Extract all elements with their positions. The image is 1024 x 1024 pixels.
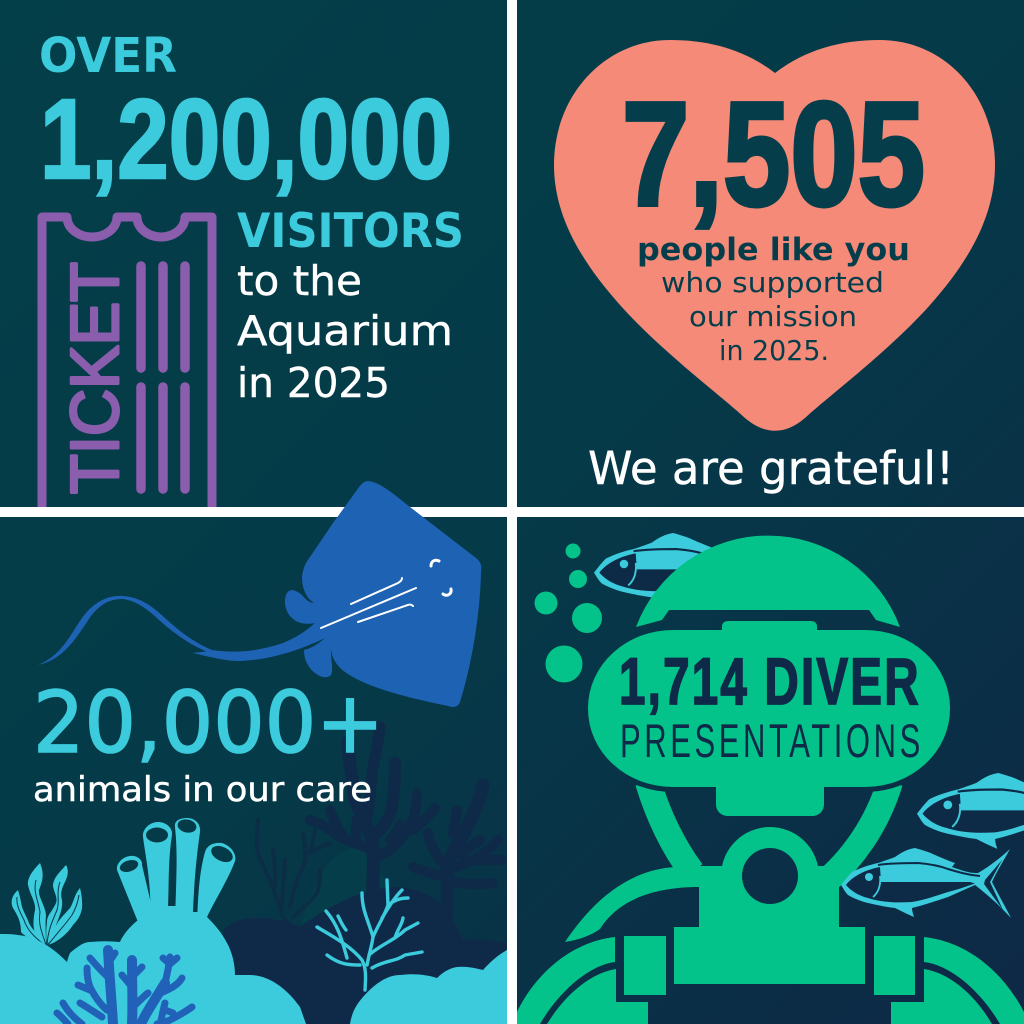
- text: who supported our mission in 2025: [661, 266, 884, 367]
- seaweed: [12, 863, 82, 945]
- icon: fish left: [594, 533, 712, 598]
- text: to the Aquarium in 2025: in 2025: [237, 359, 390, 407]
- dark navy mounds: [223, 887, 507, 1024]
- stat: 7,505: 7,505: [622, 72, 925, 237]
- text: animals in our care: animals in our care: [33, 770, 372, 810]
- icon: fish upper right: [917, 773, 1024, 850]
- coral: light cyan branching: [317, 880, 422, 990]
- coral: tube sponge: [117, 818, 235, 930]
- text: who supported our mission in 2025: our mission: [689, 300, 857, 333]
- stat: 20,000+: 20,000+: [33, 674, 384, 773]
- label: people like you: people like you: [637, 232, 910, 268]
- text: to the Aquarium in 2025: [237, 257, 453, 407]
- icon: stingray: [38, 481, 481, 707]
- text: to the Aquarium in 2025: Aquarium: [237, 307, 453, 355]
- text: we are grateful: We are grateful!: [588, 442, 954, 495]
- icon: bubbles: [534, 544, 602, 682]
- text: to the Aquarium in 2025: to the: [237, 257, 362, 305]
- light cyan mounds: [0, 912, 306, 1024]
- label: visitors: VISITORS: [237, 204, 464, 259]
- stat: 1,200,000: 1,200,000: [40, 76, 452, 202]
- illustration: reef: [0, 727, 507, 1024]
- text: who supported our mission in 2025: in 2025.: [719, 334, 829, 367]
- icon: ticket: [42, 217, 212, 507]
- heading: over: OVER: [39, 28, 177, 84]
- icon: fish lower right: [841, 848, 1011, 918]
- panel: visitors: [39, 28, 464, 507]
- coral: blue branching: [57, 950, 192, 1024]
- text: 1,714 diver: 1,714 DIVER: [619, 645, 919, 719]
- panel: diver presentations: [517, 533, 1024, 1024]
- text: presentations: PRESENTATIONS: [620, 716, 920, 768]
- icon: diver: [517, 536, 1024, 1024]
- text: who supported our mission in 2025: who supported: [661, 266, 884, 299]
- icon: heart: [554, 40, 995, 431]
- icon: ticket: TICKET: [57, 262, 133, 494]
- panel: supporters: [554, 40, 995, 495]
- panel: animals: [0, 481, 507, 1024]
- dark background corals: [257, 727, 501, 940]
